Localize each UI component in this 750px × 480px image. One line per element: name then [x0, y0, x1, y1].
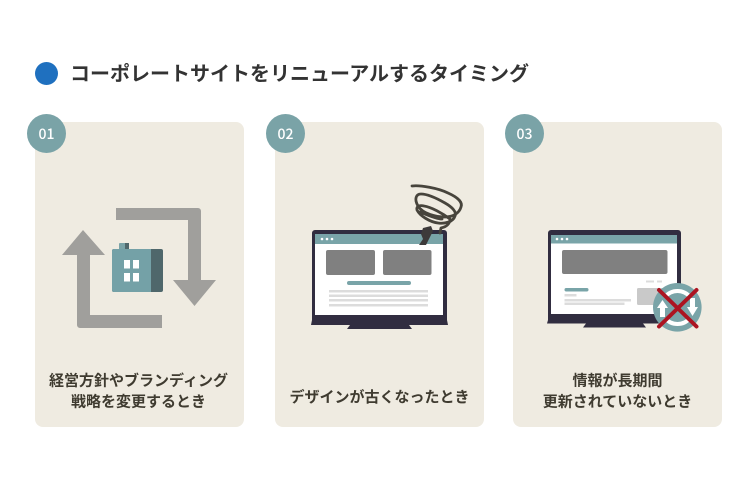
arrow: top right [116, 208, 216, 306]
number badge 01 [27, 114, 66, 153]
number badge 03: 03 [517, 124, 532, 144]
card caption: 情報が長期間 [572, 372, 663, 390]
icon: laptop with old design [311, 230, 448, 329]
icon: building [112, 243, 163, 292]
number badge 02: 02 [278, 124, 293, 144]
icon: tornado scribble [412, 186, 461, 245]
card caption [49, 372, 228, 410]
icon: crossed-out update symbol [653, 283, 702, 332]
number badge 02 [266, 114, 305, 153]
card background [35, 122, 244, 427]
card caption: デザインが古くなったとき [289, 388, 470, 406]
panel: 02 outdated design [266, 114, 484, 427]
arrow: bottom left [62, 230, 162, 328]
heading [35, 62, 529, 86]
card caption: 戦略を変更するとき [71, 392, 206, 410]
icon: laptop with stale content [547, 230, 683, 328]
panel: 03 information not updated [505, 114, 722, 427]
card background [275, 122, 484, 427]
heading text: コーポレートサイトをリニューアルするタイミング [70, 62, 529, 86]
heading marker dot [35, 62, 58, 85]
number badge 01: 01 [39, 124, 54, 144]
panel: 01 brand strategy change [27, 114, 244, 427]
card caption: 経営方針やブランディング [49, 372, 228, 390]
card background [513, 122, 722, 427]
card caption: 更新されていないとき [543, 394, 692, 410]
number badge 03 [505, 114, 544, 153]
icon: cycle arrows around building [62, 208, 216, 328]
card caption [543, 372, 692, 410]
